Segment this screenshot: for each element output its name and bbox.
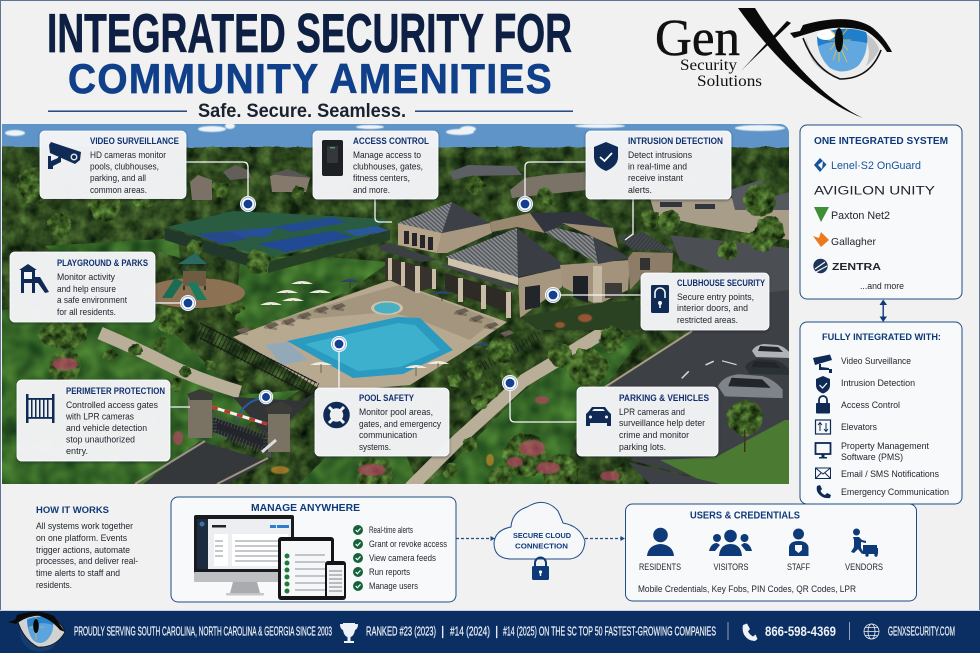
how it works text — [36, 505, 138, 590]
icon: visitors — [709, 530, 752, 556]
panel: users and credentials: Mobile Credentials, Key Fobs, PIN Codes, QR Codes, LPR — [638, 584, 856, 594]
panel: fully integrated with: Email / SMS Notifications — [841, 469, 940, 479]
callout: intrusion detection — [586, 131, 731, 199]
hedges by clubhouse — [520, 300, 640, 330]
arrow: manage to cloud — [456, 536, 495, 541]
footer band: #14 (2025) ON THE SC TOP 50 FASTEST-GROWING COMPANIES — [503, 624, 716, 638]
panel: fully integrated with: Emergency Communication — [841, 487, 949, 497]
icon: play structure — [19, 264, 49, 293]
title: INTEGRATED SECURITY FOR — [47, 3, 572, 64]
brand: Zentra — [813, 259, 881, 273]
callout: parking and vehicles: PARKING & VEHICLES — [619, 393, 709, 403]
callout: perimeter protection: with LPR cameras — [65, 412, 134, 422]
parking lot — [603, 290, 790, 484]
icon: card reader — [322, 140, 343, 176]
brand: Lenel S2 OnGuard: Lenel·S2 OnGuard — [831, 160, 921, 172]
how it works text: All systems work together — [36, 521, 133, 531]
callout: playground and parks: for all residents. — [57, 307, 116, 318]
callout: access control — [313, 131, 438, 199]
callout: clubhouse security: interior doors, and — [677, 303, 748, 314]
GenX Security Solutions logo — [655, 8, 892, 118]
device: phone — [325, 561, 346, 600]
callout: parking and vehicles: LPR cameras and — [619, 407, 685, 418]
brand: Zentra: ZENTRA — [832, 261, 881, 273]
title — [47, 3, 572, 102]
connector lines — [155, 162, 641, 422]
callout: pool safety — [315, 388, 449, 456]
icon: envelope — [816, 468, 830, 478]
pool fence — [200, 331, 317, 391]
GenX Security Solutions logo: Gen — [655, 10, 740, 67]
feature checklist: Run reports — [369, 567, 410, 577]
panel: fully integrated with: Elevators — [841, 422, 878, 432]
GenX Security Solutions logo: Solutions — [697, 73, 762, 90]
callout: intrusion detection: Detect intrusions — [628, 150, 692, 161]
panel: one integrated system: ...and more — [860, 281, 904, 291]
callout markers — [180, 196, 561, 404]
panel: users and credentials: STAFF — [787, 562, 810, 572]
callout: access control: Manage access to — [353, 150, 421, 161]
feature checklist — [353, 525, 447, 591]
icon: phone — [743, 624, 758, 641]
brand: Avigilon Unity: AVIGILON UNITY — [814, 186, 935, 198]
panel: fully integrated with: Access Control — [841, 400, 900, 410]
icon: shield — [594, 142, 618, 171]
footer band — [0, 610, 980, 653]
arrow: cloud to users — [585, 536, 625, 541]
footer band: PROUDLY SERVING SOUTH CAROLINA, NORTH CAROLINA & GEORGIA SINCE 2003 — [74, 624, 332, 638]
panel: manage anywhere: MANAGE ANYWHERE — [251, 502, 360, 514]
how it works text: on one platform. Events — [36, 533, 128, 543]
icon: padlock — [651, 285, 669, 313]
shrubs along fence — [104, 337, 513, 392]
panel: fully integrated with: FULLY INTEGRATED WITH: — [822, 332, 941, 343]
callout: pool safety: systems. — [359, 442, 391, 453]
panel: fully integrated with: Software (PMS) — [841, 452, 903, 462]
panel: users and credentials: VISITORS — [714, 562, 749, 572]
icon: trophy — [340, 623, 358, 643]
playground — [145, 278, 245, 308]
panel: fully integrated with: Intrusion Detection — [841, 378, 915, 388]
callout: intrusion detection: receive instant — [628, 173, 683, 184]
footer band: 866-598-4369 — [765, 624, 836, 639]
cloud: secure cloud connection — [494, 502, 585, 580]
icon: monitor — [816, 443, 830, 458]
callout: intrusion detection: in real-time and — [628, 162, 687, 172]
brand: Paxton Net2 — [814, 207, 890, 222]
callout: playground and parks — [10, 252, 155, 322]
callout: playground and parks: PLAYGROUND & PARKS — [57, 258, 148, 268]
callout: playground and parks: and help ensure — [57, 284, 116, 295]
how it works text: residents. — [36, 580, 72, 590]
callout: parking and vehicles: parking lots. — [619, 442, 666, 453]
callout: pool safety: communication — [359, 430, 417, 441]
callout: perimeter protection — [17, 380, 170, 461]
feature checklist: View camera feeds — [369, 553, 436, 563]
callout: intrusion detection: alerts. — [628, 185, 652, 196]
how it works text: processes, and deliver real- — [36, 556, 138, 566]
tagline: Safe. Secure. Seamless. — [198, 101, 406, 122]
callout: parking and vehicles — [577, 387, 718, 456]
GenX Security Solutions logo: Security — [680, 57, 737, 74]
feature checklist: Manage users — [369, 581, 418, 591]
cloud: secure cloud connection: SECURE CLOUD — [513, 531, 572, 540]
callout: perimeter protection: and vehicle detection — [66, 423, 147, 434]
how it works text: trigger actions, automate — [36, 545, 130, 555]
icon: camera — [813, 354, 832, 373]
panel: fully integrated with — [800, 322, 962, 504]
panel: one integrated system: ONE INTEGRATED SYSTEM — [814, 135, 948, 147]
icon: vendors — [851, 528, 878, 557]
lawns — [2, 238, 640, 484]
panel: fully integrated with: Property Management — [841, 441, 930, 451]
callout: access control: clubhouses, gates, — [353, 162, 423, 172]
icon: security camera — [48, 142, 81, 169]
photo: aerial view of the community — [0, 123, 800, 497]
title: COMMUNITY AMENITIES — [68, 55, 553, 102]
callout: playground and parks: a safe environment — [57, 295, 127, 306]
callout: video surveillance: VIDEO SURVEILLANCE — [90, 136, 179, 146]
entrance drive and gate — [233, 394, 314, 438]
panel: users and credentials: USERS & CREDENTIALS — [690, 510, 800, 522]
callout: access control: fitness centers, — [353, 173, 410, 184]
icon: footer eye — [8, 612, 65, 652]
pool deck — [233, 280, 507, 392]
callout: perimeter protection: Controlled access gates — [66, 400, 158, 411]
tennis courts — [167, 211, 387, 258]
footer band: | — [441, 624, 444, 638]
callout: video surveillance — [40, 131, 186, 198]
callout: video surveillance: HD cameras monitor — [90, 150, 166, 161]
panel: one integrated system — [800, 125, 962, 299]
feature checklist: Grant or revoke access — [369, 539, 447, 549]
icon: phone — [817, 485, 831, 498]
brand: Paxton Net2: Paxton Net2 — [831, 210, 890, 222]
callout: playground and parks: Monitor activity — [57, 272, 115, 283]
callout: intrusion detection: INTRUSION DETECTION — [628, 136, 723, 146]
forest base — [0, 147, 800, 497]
callout: pool safety: Monitor pool areas, — [359, 407, 433, 418]
callout: access control: and more. — [353, 185, 390, 196]
icon: logo eye — [790, 19, 892, 79]
panel: fully integrated with: Video Surveillance — [841, 356, 911, 366]
footer band: | — [495, 624, 498, 638]
brand: Gallagher: Gallagher — [831, 236, 876, 248]
callout: clubhouse security: Secure entry points, — [677, 292, 754, 303]
callout: parking and vehicles: surveillance help deter — [619, 418, 705, 429]
icon: car — [586, 407, 611, 426]
icon: elevator — [816, 420, 830, 434]
callout: perimeter protection: entry. — [66, 446, 88, 457]
icon: gate — [26, 394, 54, 423]
tree clusters — [17, 167, 784, 350]
clubhouse — [398, 223, 442, 253]
callout: parking and vehicles: crime and monitor — [619, 430, 689, 441]
icon: lock — [816, 396, 830, 414]
icon: life ring — [326, 405, 346, 425]
footer band: RANKED #23 (2023) — [366, 624, 436, 638]
callout: pool safety: gates, and emergency — [359, 419, 441, 430]
right street — [670, 235, 789, 292]
device: desktop monitor — [194, 515, 294, 596]
callout: clubhouse security: restricted areas. — [677, 315, 738, 326]
cloud: secure cloud connection: CONNECTION — [515, 542, 568, 550]
umbrellas and chairs — [291, 281, 313, 292]
pool — [287, 317, 453, 378]
how it works text: time alerts to staff and — [36, 568, 120, 578]
icon: residents — [647, 528, 674, 556]
icon: cloud lock — [532, 558, 549, 580]
footer band: #14 (2024) — [450, 624, 490, 638]
landscaping — [49, 327, 763, 493]
icon: shield — [816, 376, 830, 394]
panel: users and credentials: RESIDENTS — [639, 562, 681, 572]
icon: staff — [789, 528, 808, 556]
panel: users and credentials: VENDORS — [845, 562, 883, 572]
panel: users and credentials — [626, 504, 916, 601]
how it works text: HOW IT WORKS — [36, 505, 109, 516]
callout: video surveillance: parking, and all — [90, 173, 146, 184]
callout: perimeter protection: stop unauthorized — [66, 434, 135, 446]
callout: video surveillance: common areas. — [90, 185, 147, 196]
arrow: two-way link between panels — [880, 300, 887, 322]
callout: clubhouse security — [641, 273, 769, 330]
walkways — [100, 330, 607, 488]
panel: manage anywhere — [171, 497, 456, 602]
callout: clubhouse security: CLUBHOUSE SECURITY — [677, 278, 765, 288]
callout: video surveillance: pools, clubhouses, — [90, 162, 159, 172]
callout: access control: ACCESS CONTROL — [353, 136, 429, 146]
device: tablet — [278, 537, 334, 600]
feature checklist: Real-time alerts — [369, 525, 413, 535]
brand: Gallagher — [813, 232, 876, 248]
icon: globe — [864, 624, 879, 639]
callout: perimeter protection: PERIMETER PROTECTION — [66, 386, 165, 396]
callout: pool safety: POOL SAFETY — [359, 393, 414, 403]
far houses — [190, 175, 212, 200]
